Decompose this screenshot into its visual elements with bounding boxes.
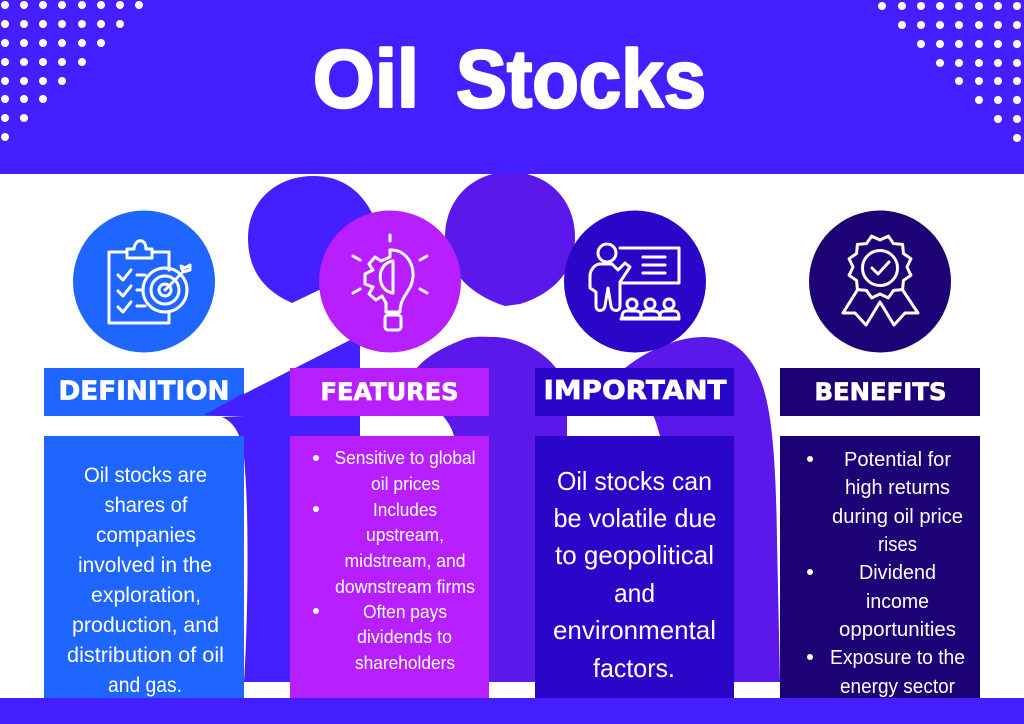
text block: benefits: Potential for bbox=[844, 449, 951, 471]
heading: definition: DEFINITION bbox=[58, 376, 230, 406]
heading: benefits bbox=[780, 368, 980, 416]
text block: features: oil prices bbox=[371, 474, 440, 494]
icon: lightbulb with gear bbox=[319, 210, 461, 352]
title: Stocks bbox=[456, 34, 706, 125]
text block: features bbox=[290, 436, 489, 698]
text block: features: Often pays bbox=[363, 602, 447, 622]
panel: important bbox=[535, 210, 734, 698]
text block: features: Sensitive to global bbox=[334, 448, 476, 468]
background silhouette: people bbox=[222, 172, 780, 682]
icon: presenter at board bbox=[564, 210, 706, 352]
heading: definition bbox=[44, 368, 244, 416]
text block: definition: Oil stocks are bbox=[84, 464, 207, 487]
panel: definition bbox=[44, 210, 244, 698]
text block: important: Oil stocks can bbox=[557, 466, 712, 496]
text block: features: downstream firms bbox=[335, 577, 475, 597]
text block: definition: and gas. bbox=[108, 674, 182, 697]
text block: definition: production, and bbox=[72, 614, 219, 637]
text block: benefits: during oil price bbox=[832, 506, 963, 528]
text block: features: midstream, and bbox=[344, 551, 466, 571]
text block: definition bbox=[44, 436, 244, 698]
text block: benefits: Exposure to the bbox=[830, 647, 965, 669]
panel: benefits bbox=[780, 210, 980, 698]
title bbox=[313, 34, 706, 125]
text block: features: upstream, bbox=[366, 525, 444, 545]
header band bbox=[0, 0, 1024, 174]
text block: important: factors. bbox=[593, 653, 675, 683]
heading: features bbox=[290, 368, 489, 416]
text block: definition: shares of bbox=[104, 494, 188, 517]
text block: important: be volatile due bbox=[554, 503, 716, 533]
text block: features: dividends to bbox=[357, 627, 452, 647]
text block: definition: involved in the bbox=[78, 554, 212, 577]
text block: benefits: Dividend bbox=[859, 562, 936, 584]
dots: top right bbox=[878, 2, 1021, 142]
bottom band bbox=[0, 698, 1024, 724]
panel: features bbox=[290, 210, 489, 698]
heading: important: IMPORTANT bbox=[544, 376, 727, 406]
text block: definition: exploration, bbox=[91, 584, 201, 607]
text block: features: shareholders bbox=[355, 653, 455, 673]
text block: important: and bbox=[614, 578, 655, 608]
text block: benefits: rises bbox=[878, 534, 917, 556]
text block: benefits: opportunities bbox=[839, 619, 956, 641]
text block: benefits: income bbox=[866, 591, 929, 613]
heading: features: FEATURES bbox=[320, 378, 458, 406]
heading: benefits: BENEFITS bbox=[814, 378, 946, 406]
text block: features: Includes bbox=[373, 500, 437, 520]
text block: important: to geopolitical bbox=[555, 540, 714, 570]
icon: clipboard and target bbox=[73, 210, 215, 352]
text block: definition: companies bbox=[96, 524, 196, 547]
text block: benefits: energy sector bbox=[840, 676, 955, 698]
heading: important bbox=[535, 368, 734, 416]
text block: important bbox=[535, 436, 734, 698]
text block: benefits: high returns bbox=[845, 477, 950, 499]
title: Oil bbox=[313, 34, 419, 125]
silhouette tip over heading bbox=[204, 393, 244, 416]
icon: award rosette bbox=[809, 210, 951, 352]
text block: definition: distribution of oil bbox=[67, 644, 224, 667]
text block: important: environmental bbox=[553, 615, 716, 645]
text block: benefits bbox=[780, 436, 980, 698]
dots: top left bbox=[1, 1, 143, 141]
